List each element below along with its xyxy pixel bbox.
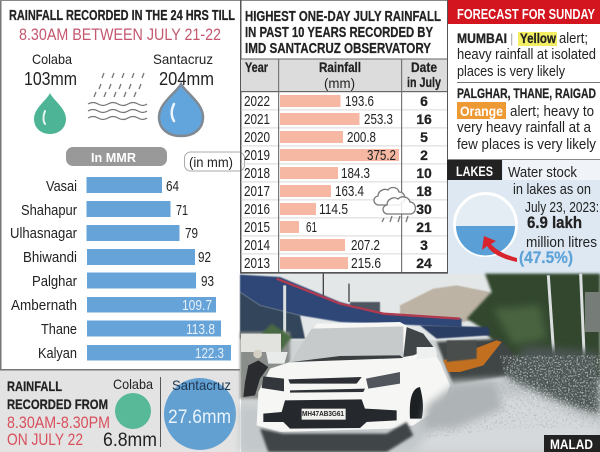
table: rainfall by year: 375.2 (367, 147, 396, 164)
label: Colaba: Colaba (32, 51, 72, 67)
trees (467, 274, 600, 379)
table: rainfall by year: 6 (420, 93, 428, 109)
table: rainfall by year: 61 (306, 219, 317, 236)
table: rainfall by year: 5 (420, 129, 428, 145)
bar chart: rainfall in MMR: Kalyan (38, 346, 77, 362)
bar chart: rainfall in MMR: Shahapur (21, 203, 77, 219)
Colaba reading: Colaba (113, 376, 153, 392)
table header: Rainfall (319, 60, 361, 75)
table: rainfall by year: 30 (416, 201, 432, 217)
bar chart: rainfall in MMR: 71 (176, 202, 188, 219)
text: Mumbai yellow alert: places is very likely (457, 64, 566, 80)
table: rainfall by year: 215.6 (351, 255, 381, 272)
bar chart: rainfall in MMR: 122.3 (195, 345, 224, 362)
water (240, 379, 600, 452)
dark spray field (503, 345, 600, 415)
bar chart: rainfall in MMR (10, 177, 231, 362)
table: rainfall by year: 2013 (244, 255, 270, 272)
car (257, 322, 450, 452)
buildings (400, 285, 493, 322)
table: rainfall by year: 2019 (244, 147, 270, 164)
label: LAKES (447, 160, 502, 180)
number plate text: MH47AB3G61 (302, 409, 344, 418)
heading: rainfall recorded: RAINFALL RECORDED IN THE 24 HRS TILL (9, 8, 235, 24)
subheading: time range: 8.30AM-8.30PM (7, 414, 110, 432)
text: Palghar Thane Raigad orange alert: Orange (460, 103, 503, 119)
Santacruz reading (164, 377, 236, 450)
heading: highest one-day rainfall (245, 9, 441, 57)
table: rainfall by year: 2014 (244, 237, 270, 254)
panel: rainfall 8.30am to 8.30pm: RECORDED FROM (7, 396, 108, 412)
label: in mm (184, 152, 244, 171)
table: rainfall by year: 3 (420, 237, 428, 253)
splash over wheel (423, 382, 503, 429)
bar chart: rainfall in MMR: Palghar (32, 274, 77, 290)
text: water stock (508, 165, 599, 267)
flyover (240, 275, 462, 327)
table: rainfall by year: 2016 (244, 201, 270, 218)
table header: Date (411, 60, 437, 75)
table: rainfall by year: 2017 (244, 183, 270, 200)
text: water stock: Water stock (508, 165, 578, 181)
text: water stock: million litres (526, 235, 597, 251)
heading: rainfall recorded from: RAINFALL (7, 378, 62, 394)
text: water stock: in lakes as on (513, 182, 591, 198)
text: Palghar Thane Raigad orange alert: alert; heavy to (510, 104, 594, 120)
table: rainfall by year: 253.3 (364, 111, 393, 128)
value: Santacruz 204mm: 204mm (159, 68, 214, 89)
panel: highest one-day July rainfall (240, 0, 447, 275)
bar chart: rainfall in MMR: 64 (166, 178, 179, 195)
text: Mumbai yellow alert (457, 31, 596, 80)
table: rainfall by year: 16 (416, 111, 432, 127)
Santacruz reading: 27.6mm (168, 407, 231, 428)
poles (285, 274, 585, 375)
arrow: level pointer (482, 236, 517, 262)
icon: rain clouds (374, 188, 415, 222)
table: rainfall by year: 24 (416, 255, 432, 271)
photo: car splashing through flooded road at Malad (240, 274, 600, 452)
panel: rainfall 8.30am to 8.30pm: ON JULY 22 (7, 431, 83, 449)
icon: lake gauge circle (454, 194, 516, 256)
text: Palghar Thane Raigad orange alert: very heavy rainfall at a (457, 120, 592, 136)
heading: highest one-day rainfall: IN PAST 10 YEARS RECORDED BY (245, 25, 433, 41)
bar chart: rainfall in MMR: Vasai (46, 179, 77, 195)
bar chart: rainfall in MMR: 113.8 (186, 321, 215, 338)
icon: rain and waves (88, 73, 147, 120)
table header: (mm) (324, 76, 355, 91)
text: Mumbai yellow alert: alert; (559, 31, 588, 47)
Colaba reading: 6.8mm (103, 430, 157, 451)
bar chart: rainfall in MMR: Bhiwandi (23, 250, 77, 266)
table: rainfall by year: 18 (416, 183, 432, 199)
table: rainfall by year: 200.8 (347, 129, 376, 146)
sky (240, 274, 507, 340)
table: rainfall by year: 114.5 (319, 201, 348, 218)
label: In MMR pill (66, 147, 167, 166)
table header: Year (245, 60, 269, 75)
label: in mm: (in mm) (189, 155, 233, 170)
table: rainfall by year: 184.3 (341, 165, 370, 182)
panel: lakes water stock (447, 0, 600, 275)
label: In MMR pill: In MMR (91, 150, 137, 165)
table: rainfall by year: 193.6 (345, 93, 374, 110)
bar chart: rainfall in MMR: Ulhasnagar (10, 226, 77, 242)
value: Colaba 103mm: 103mm (24, 68, 77, 89)
subheading: dates: 8.30AM BETWEEN JULY 21-22 (19, 26, 221, 44)
table header: in July (407, 75, 441, 90)
bar chart: rainfall in MMR: 93 (201, 273, 214, 290)
bar chart: rainfall in MMR: 79 (185, 225, 198, 242)
label: Santacruz: Santacruz (153, 51, 213, 67)
label: LAKES: LAKES (456, 163, 493, 179)
table: rainfall by year: 2020 (244, 129, 270, 146)
table: rainfall by year: 2015 (244, 219, 270, 236)
bar chart: rainfall in MMR: 92 (198, 249, 211, 266)
text: water stock: (47.5%) (519, 248, 573, 267)
table: rainfall by year: 2021 (244, 111, 270, 128)
table header (241, 59, 447, 92)
bar chart: rainfall in MMR: Ambernath (11, 298, 77, 314)
table: rainfall by year: 2022 (244, 93, 270, 110)
bar chart: rainfall in MMR: 109.7 (182, 297, 212, 314)
table: rainfall by year: 207.2 (351, 237, 380, 254)
road and truck (437, 339, 530, 385)
table: rainfall by year: 2018 (244, 165, 270, 182)
text: Palghar Thane Raigad orange alert (457, 86, 597, 153)
heading: highest one-day rainfall: IMD SANTACRUZ OBSERVATORY (245, 41, 431, 57)
panel: rainfall 8.30am to 8.30pm (0, 369, 240, 452)
icon: blue water drop (159, 84, 203, 136)
heading: highest one-day rainfall: HIGHEST ONE-DAY JULY RAINFALL (245, 9, 441, 25)
Santacruz reading: Santacruz (172, 377, 231, 393)
table: rainfall by year (241, 58, 447, 274)
text: water stock: 6.9 lakh (527, 213, 582, 232)
bar chart: rainfall in MMR: Thane (41, 322, 77, 338)
text: Mumbai yellow alert: Yellow (520, 31, 556, 46)
table: rainfall by year: 163.4 (335, 183, 364, 200)
text: Mumbai yellow alert: MUMBAI (457, 31, 507, 46)
text: Mumbai yellow alert: | (510, 31, 513, 46)
table: rainfall by year: 2 (420, 147, 428, 163)
table: rainfall by year: 21 (416, 219, 432, 235)
Colaba reading (103, 376, 157, 451)
spray speckle (500, 355, 600, 415)
left background road (240, 332, 290, 399)
panel: forecast for Sunday (447, 0, 600, 160)
location tag: Malad: MALAD (550, 436, 593, 452)
icon: green water drop (34, 93, 66, 134)
table: rainfall by year: 10 (416, 165, 432, 181)
heading bar: forecast (447, 0, 600, 24)
